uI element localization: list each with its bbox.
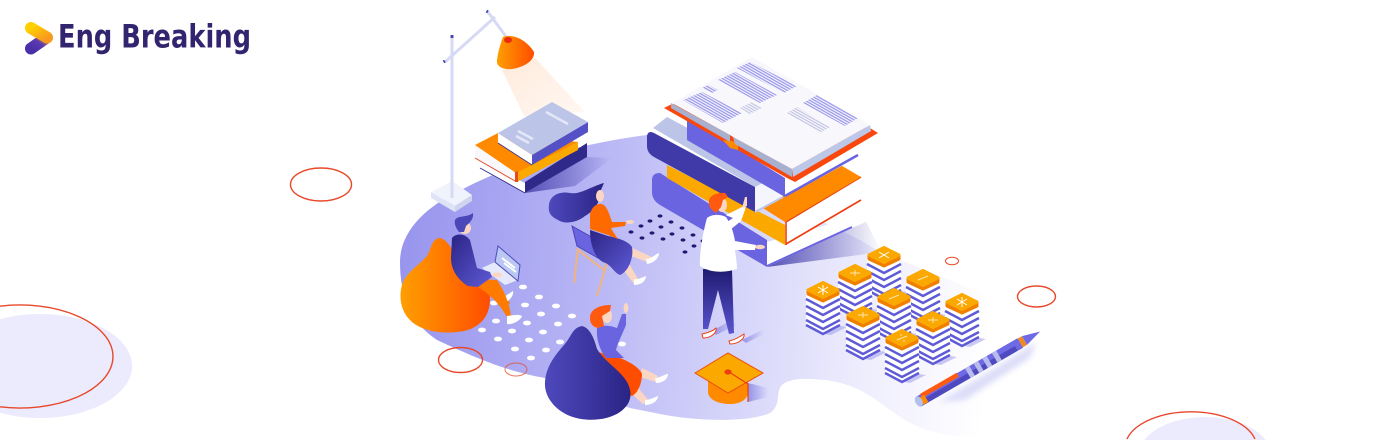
- book shadow: [525, 157, 612, 193]
- logo icon: [31, 28, 47, 48]
- woman's hand: [626, 220, 634, 224]
- stack front left: [846, 308, 887, 360]
- floor blob: [400, 135, 1000, 437]
- man's back leg and shoe: [495, 290, 510, 304]
- yellow book: [667, 163, 861, 245]
- middle book: [475, 133, 578, 182]
- stack back: [867, 248, 908, 300]
- navy book: [647, 117, 785, 212]
- man's head: [459, 222, 471, 234]
- cap top: [695, 353, 763, 393]
- lamp light cone: [502, 58, 585, 116]
- pencil clip: [920, 373, 959, 398]
- logo wordmark: Eng Breaking: [58, 18, 251, 56]
- woman's shoes: [645, 374, 668, 405]
- small book stack: [475, 102, 612, 193]
- cap tassel: [725, 370, 748, 402]
- stack center: [877, 290, 918, 342]
- small ring near coins: [946, 257, 958, 265]
- pencil band: [1018, 336, 1027, 347]
- teacher's hair: [709, 193, 728, 213]
- pencil tip: [1022, 327, 1043, 345]
- decorative ring: upper-left: [290, 168, 352, 201]
- small floor rings: [438, 348, 527, 376]
- dark floor dots: [628, 214, 706, 254]
- blue book: [687, 118, 858, 197]
- woman's legs: [630, 368, 658, 404]
- stack left: [806, 282, 847, 335]
- woman's blue top: [597, 314, 626, 358]
- bottom book: [478, 143, 587, 193]
- book shadow: [767, 222, 882, 267]
- stack right: [945, 294, 986, 347]
- top book: [498, 102, 588, 165]
- chair: [572, 226, 607, 296]
- stack front: [885, 330, 926, 383]
- large book stack: [647, 57, 882, 267]
- teacher's shoes: [702, 328, 744, 344]
- woman's orange top: [590, 204, 626, 239]
- teacher's scarf: [714, 212, 733, 222]
- pencil shadow: [940, 342, 1036, 402]
- blue beanbag: [545, 326, 631, 420]
- woman's head: [602, 309, 612, 323]
- person: man on orange beanbag with laptop: [400, 213, 522, 333]
- woman's legs: [622, 247, 652, 284]
- cap base: [708, 380, 748, 404]
- teacher's head: [717, 198, 727, 212]
- ring right of coins: [1018, 286, 1056, 307]
- cap shadow: [748, 383, 768, 402]
- woman's shoes: [634, 253, 659, 285]
- woman's hair: [590, 305, 611, 328]
- open book cover: [664, 104, 878, 182]
- open book text blocks: [683, 92, 742, 123]
- decorative circle: bottom-right: [1127, 412, 1266, 440]
- graduation cap: [695, 353, 768, 404]
- lamp shade: [497, 36, 534, 69]
- person: teacher: [700, 193, 765, 344]
- woman's raised hand: [624, 303, 628, 313]
- stack back right: [906, 270, 947, 323]
- woman's red skirt: [598, 352, 642, 396]
- pencil stripes: [967, 352, 1000, 377]
- teacher's hand: [755, 245, 765, 249]
- man's orange trousers: [476, 279, 511, 317]
- woman's head: [596, 190, 604, 202]
- bottom book: [652, 173, 852, 267]
- logo: [31, 18, 251, 56]
- man's hand: [492, 272, 502, 278]
- pencil: [913, 326, 1043, 408]
- person: woman on chair: [549, 183, 659, 296]
- man's hair: [455, 213, 473, 232]
- woman's skirt: [590, 230, 632, 275]
- laptop: [482, 246, 520, 285]
- man's torso: [451, 234, 492, 287]
- teacher's raised arm: [724, 199, 747, 230]
- stack front right: [916, 312, 957, 365]
- teacher's trousers: [703, 269, 734, 334]
- orange beanbag: [400, 238, 490, 333]
- lamp base: [431, 181, 472, 212]
- woman's hair: [549, 183, 604, 223]
- teacher's shadows: [712, 322, 738, 335]
- teacher's shirt: [700, 215, 756, 272]
- pencil end cap: [913, 395, 925, 408]
- open book pages: [672, 57, 870, 169]
- person: woman on blue beanbag: [545, 303, 668, 420]
- pencil body: [915, 338, 1020, 402]
- lamp: [431, 11, 585, 212]
- man's front shoe: [507, 315, 522, 324]
- stack back left: [838, 266, 879, 318]
- decorative circle: bottom-left: [0, 305, 132, 418]
- open book page edges: [671, 103, 730, 142]
- open book: [664, 57, 878, 182]
- white floor dots: [478, 285, 626, 360]
- coin stacks: [806, 248, 986, 383]
- lamp pole: [445, 12, 510, 198]
